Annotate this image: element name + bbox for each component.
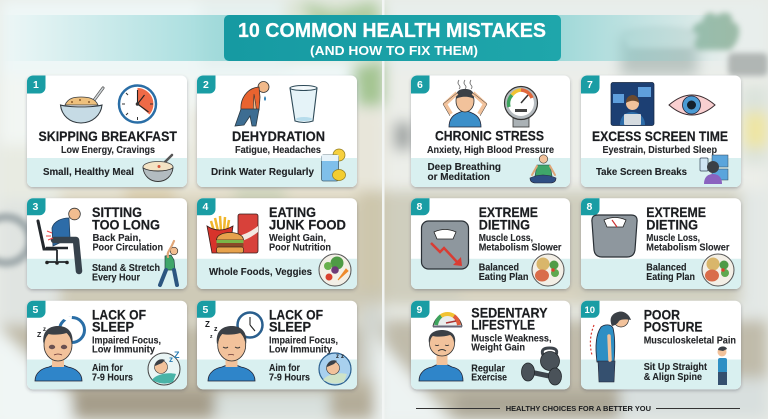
- symptoms: Eyestrain, Disturbed Sleep: [602, 144, 717, 156]
- panel: 2 dehydration: 2: [203, 79, 209, 91]
- symptoms: Low Immunity: [92, 344, 155, 356]
- symptoms: Weight Gain,: [269, 232, 326, 244]
- icon: kettlebell and dumbbell: [522, 348, 562, 385]
- heading: LACK OF: [269, 307, 323, 322]
- panel: 5 lack of sleep duplicate: [197, 301, 357, 389]
- heading: SLEEP: [269, 319, 311, 334]
- symptoms: Muscle Loss,: [646, 232, 700, 244]
- footer tagline: HEALTHY CHOICES FOR A BETTER YOU: [506, 404, 651, 413]
- symptoms: [479, 232, 562, 254]
- symptoms: Poor Nutrition: [269, 242, 331, 254]
- panel: 5 lack of sleep: 5: [32, 304, 38, 316]
- icon: bathroom scale: [592, 215, 637, 257]
- panel: 8 extreme dieting with downward arrow: [411, 198, 570, 289]
- panel: 7 excess screen time: 7: [587, 79, 593, 91]
- icon: sleeping badge: Z: [174, 350, 180, 360]
- fix: Small, Healthy Meal: [43, 166, 134, 178]
- fix: [92, 362, 133, 384]
- icon: balanced plate: [702, 254, 734, 286]
- fix: [428, 161, 501, 183]
- fix: Stand & Stretch: [92, 262, 160, 274]
- heading: EXTREME: [479, 205, 538, 220]
- heading: [92, 307, 146, 334]
- icon: sleepy person with clock: z: [210, 334, 213, 340]
- icon: sleeping badge blue: z: [336, 354, 339, 360]
- symptoms: Musculoskeletal Pain: [644, 334, 736, 346]
- symptoms: [92, 232, 163, 254]
- panel: 3 sitting too long: 3: [32, 201, 38, 213]
- symptoms: Muscle Loss,: [479, 232, 533, 244]
- heading: SEDENTARY: [471, 305, 548, 320]
- icon: low activity gauge: [433, 313, 462, 328]
- panel: 8 extreme dieting with scale: [581, 198, 741, 289]
- fix: [269, 362, 310, 384]
- fix: Eating Plan: [646, 271, 695, 283]
- icon: tired person with broken clock: z: [43, 327, 46, 333]
- symptoms: Poor Circulation: [92, 242, 163, 254]
- panel: 9 sedentary lifestyle: [411, 301, 570, 389]
- icon: clock: [119, 86, 156, 122]
- fix: Aim for: [269, 362, 300, 374]
- fix: Sit Up Straight: [644, 361, 707, 373]
- icon: red eye: [669, 95, 715, 115]
- panel: 4 eating junk food: 4: [202, 201, 208, 213]
- icon: meditating person: [530, 155, 556, 183]
- panel: 10 poor posture: [581, 301, 741, 389]
- panel: 6 chronic stress: 6: [417, 79, 423, 91]
- fix: Whole Foods, Veggies: [209, 266, 312, 278]
- icon: person sitting with back pain: [38, 208, 80, 271]
- panel: 10 poor posture: 10: [584, 305, 595, 316]
- symptoms: Muscle Weakness,: [471, 333, 552, 345]
- panel: 5 lack of sleep duplicate: 5: [202, 304, 208, 316]
- symptoms: [471, 333, 552, 354]
- fix: [92, 262, 160, 284]
- panel: 1 skipping breakfast: [27, 76, 187, 187]
- icon: tired person: [419, 330, 463, 381]
- heading: SKIPPING BREAKFAST: [38, 129, 178, 144]
- fix: 7-9 Hours: [269, 372, 310, 384]
- heading: [269, 205, 346, 232]
- symptoms: [269, 232, 331, 254]
- symptoms: [92, 334, 161, 356]
- fix: Balanced: [646, 262, 686, 274]
- icon: person with screens: [700, 155, 728, 184]
- heading: DEHYDRATION: [232, 129, 325, 144]
- heading: POSTURE: [644, 319, 702, 334]
- panel: 6 chronic stress: [411, 76, 570, 187]
- heading: DIETING: [479, 218, 530, 232]
- icon: fries, burger and soda: [207, 214, 258, 253]
- fix: [644, 361, 707, 383]
- symptoms: Impaired Focus,: [269, 334, 338, 346]
- heading: [471, 305, 548, 332]
- panel: 7 excess screen time: [581, 76, 741, 187]
- icon: balanced plate: [532, 254, 564, 286]
- subtitle: (AND HOW TO FIX THEM): [310, 43, 478, 58]
- heading: [646, 205, 706, 232]
- symptoms: Impaired Focus,: [92, 334, 161, 346]
- icon: veggie plate: [319, 254, 351, 286]
- icon: sleeping badge blue: [319, 353, 351, 385]
- icon: blood pressure gauge: [504, 86, 538, 127]
- title: 10 COMMON HEALTH MISTAKES: [238, 19, 546, 42]
- symptoms: Fatigue, Headaches: [235, 144, 321, 156]
- symptoms: [269, 334, 338, 356]
- icon: stressed person: [443, 80, 487, 127]
- panel: 8 extreme dieting with downward arrow: 8: [416, 201, 422, 213]
- symptoms: Low Immunity: [269, 344, 332, 356]
- icon: tired person with broken clock: [35, 316, 84, 381]
- icon: sleeping badge blue: z: [341, 354, 344, 360]
- fix: 7-9 Hours: [92, 372, 133, 384]
- icon: oatmeal bowl: [60, 88, 103, 123]
- fix: Exercise: [471, 372, 507, 384]
- fix: Drink Water Regularly: [211, 166, 314, 178]
- icon: water with lemon: [322, 149, 346, 181]
- icon: person stretching: [160, 241, 178, 285]
- heading: JUNK FOOD: [269, 218, 346, 232]
- heading: POOR: [644, 307, 680, 322]
- heading: EXTREME: [646, 205, 706, 220]
- heading: EXCESS SCREEN TIME: [592, 129, 728, 144]
- heading: [92, 205, 160, 232]
- fix: Deep Breathing: [428, 161, 501, 173]
- heading: LIFESTYLE: [471, 317, 535, 332]
- symptoms: Weight Gain: [471, 342, 525, 354]
- fix: Aim for: [92, 362, 123, 374]
- fix: [646, 262, 695, 283]
- icon: sleepy person with clock: z: [214, 326, 218, 333]
- icon: sleeping badge: z: [169, 355, 173, 364]
- heading: CHRONIC STRESS: [435, 128, 544, 144]
- symptoms: Metabolism Slower: [646, 242, 730, 254]
- panel: 5 lack of sleep: [27, 301, 187, 389]
- heading: [479, 205, 538, 232]
- heading: [269, 307, 323, 334]
- icon: slouching person: [590, 312, 631, 382]
- icon: sleepy person with clock: [205, 312, 262, 381]
- fix: Every Hour: [92, 272, 140, 284]
- panel: 2 dehydration: [197, 76, 357, 187]
- fix: & Align Spine: [644, 371, 702, 383]
- fix: Eating Plan: [479, 271, 528, 283]
- panel: 4 eating junk food: [197, 198, 357, 289]
- panel: 1 skipping breakfast: 1: [33, 79, 39, 91]
- icon: tired person: [235, 82, 269, 126]
- symptoms: [646, 232, 730, 254]
- fix: or Meditation: [428, 171, 490, 183]
- panel: 9 sedentary lifestyle: 9: [416, 304, 422, 316]
- heading: LACK OF: [92, 307, 146, 322]
- symptoms: Low Energy, Cravings: [61, 144, 155, 156]
- panel: 8 extreme dieting with scale: 8: [586, 201, 592, 213]
- heading: EATING: [269, 205, 316, 220]
- panel: 3 sitting too long: [27, 198, 187, 289]
- icon: upright person: [718, 346, 727, 385]
- heading: SITTING: [92, 205, 142, 220]
- icon: person at laptop at night: [611, 82, 654, 126]
- icon: healthy meal bowl: [143, 155, 173, 182]
- symptoms: Metabolism Slower: [479, 242, 562, 254]
- symptoms: Back Pain,: [92, 232, 141, 244]
- heading: SLEEP: [92, 319, 134, 334]
- heading: [644, 307, 702, 334]
- fix: Regular: [471, 362, 505, 374]
- icon: glass of water: [290, 86, 317, 122]
- fix: [471, 362, 507, 384]
- symptoms: Anxiety, High Blood Pressure: [427, 144, 554, 156]
- icon: scale with falling arrow: [422, 221, 468, 269]
- fix: [479, 262, 528, 283]
- icon: tired person with broken clock: Z: [37, 332, 42, 339]
- heading: TOO LONG: [92, 218, 160, 232]
- fix: Take Screen Breaks: [596, 166, 687, 178]
- icon: sleeping badge: [148, 350, 180, 385]
- icon: sleepy person with clock: Z: [205, 320, 210, 329]
- title banner: [0, 15, 768, 61]
- fix: Balanced: [479, 262, 519, 274]
- heading: DIETING: [646, 218, 698, 232]
